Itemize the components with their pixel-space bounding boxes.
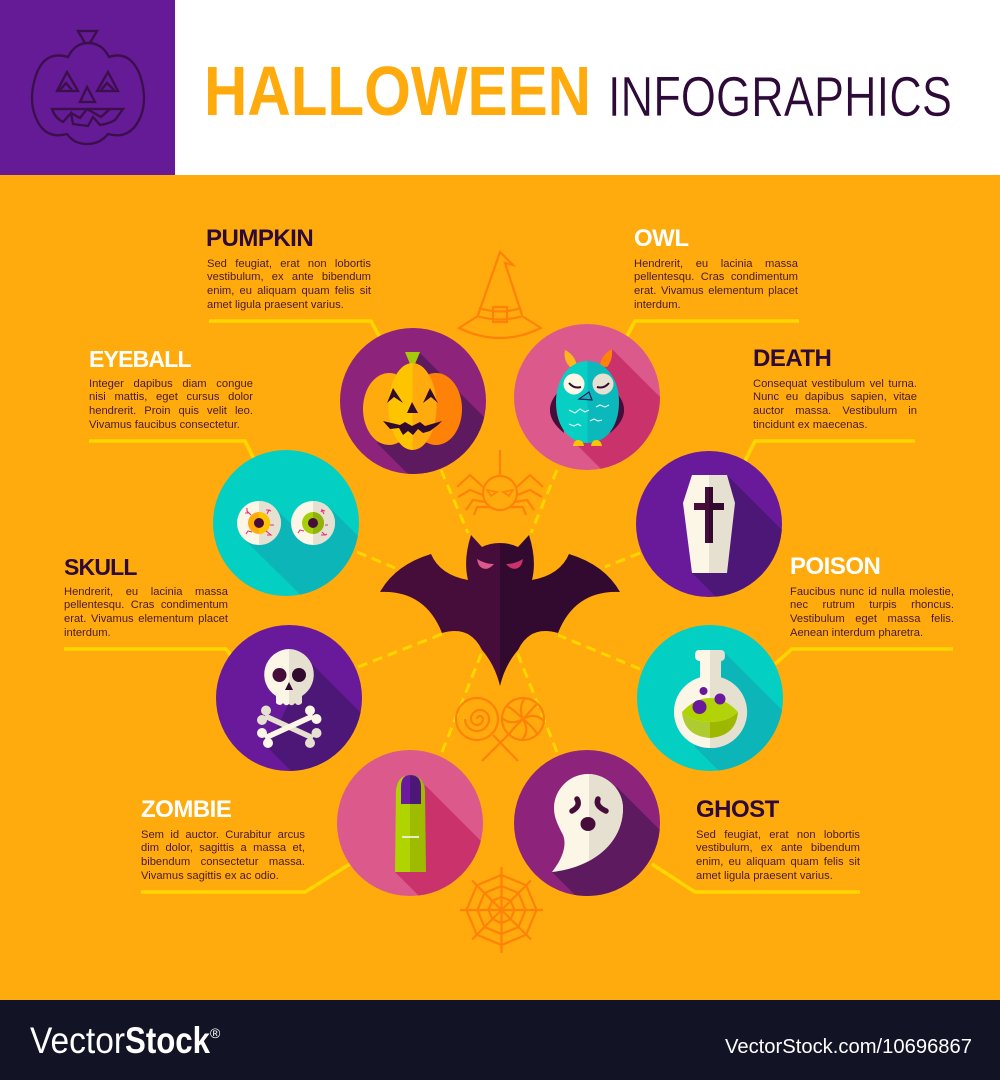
title: Halloween: HALLOWEEN [204,52,591,130]
footer bar [0,1000,1000,1080]
coffin [683,475,735,573]
text block: owl: OWL [634,225,688,252]
text block: pumpkin: Sed feugiat, erat non lobortis [207,258,371,270]
text block: zombie: Vivamus sagittis ex ac odio. [141,870,279,882]
footer url: VectorStock.com/10696867 [725,1035,972,1058]
dashed connectors [357,470,640,752]
text block: poison: POISON [790,553,880,580]
header purple panel [0,0,175,175]
text block: skull: pellentesqu. Cras condimentum [64,599,228,611]
text block: owl: pellentesqu. Cras condimentum [634,271,798,283]
text block: owl: Hendrerit, eu lacinia massa [634,258,798,270]
orange main background [0,175,1000,1000]
text block: zombie [141,796,305,882]
footer logo: VectorStock [30,1020,226,1061]
text block: eyeball: Integer dapibus diam congue [89,378,253,390]
text block: zombie: ZOMBIE [141,796,231,823]
text block: pumpkin: PUMPKIN [206,225,313,252]
icon: candy outline [456,698,544,761]
text block: eyeball: hendrerit. Proin quis velit leo. [89,405,253,417]
text block: poison: Vestibulum eget massa felis. [790,613,954,625]
text block: ghost: Sed feugiat, erat non lobortis [696,828,860,840]
panel: owl circle [514,324,660,470]
panel: zombie circle [337,750,483,896]
panel: coffin circle [636,451,782,597]
text block: ghost: vestibulum, ex ante bibendum [696,842,860,854]
icon: spider outline [457,450,543,515]
text block: death: Nunc eu dapibus sapien, vitae [753,391,917,403]
text block: skull [64,554,228,639]
eyeballs [237,501,335,545]
text block: death [753,345,917,431]
icon: witch hat outline [459,252,541,338]
icon: spiderweb outline [460,867,543,953]
text block: ghost: enim, eu aliquam quam felis sit [696,856,860,868]
ghost [552,774,623,872]
pumpkin body [363,352,462,450]
text block: death: tincidunt ex maecenas. [753,419,867,431]
yellow leader lines [64,321,953,892]
text block: owl: interdum. [634,299,681,311]
zombie finger [395,775,426,872]
footer logo: ® [210,1025,221,1041]
panel: poison circle [637,625,783,771]
text block: poison: Faucibus nunc id nulla molestie, [790,586,954,598]
header background [0,0,1000,175]
text block: ghost: amet ligula praesent varius. [696,870,833,882]
text block: death: auctor massa. Vestibulum in [753,405,917,417]
text block: zombie: Sem id auctor. Curabitur arcus [141,828,305,840]
panel: eyeball circle [213,450,359,596]
text block: zombie: bibendum consectetur massa. [141,856,305,868]
text block: poison [790,553,954,639]
text block: death: Consequat vestibulum vel turna. [753,378,917,390]
panel: skull circle [216,625,362,771]
text block: poison: nec rutrum turpis rhoncus. [790,599,954,611]
text block: eyeball: EYEBALL [89,346,191,372]
panel: pumpkin circle [340,328,486,474]
text block: pumpkin: vestibulum, ex ante bibendum [207,271,371,283]
text block: pumpkin [206,225,371,311]
icon: header pumpkin outline [32,31,144,144]
owl body [550,349,624,446]
panel: ghost circle [514,750,660,896]
text block: eyeball: Vivamus faucibus consectetur. [89,419,240,431]
text block: eyeball: nisi mattis, eget cursus dolor [89,391,253,403]
skull and crossbones [257,649,322,748]
text block: death: DEATH [753,345,831,372]
text block: skull: erat. Vivamus elementum placet [64,613,228,625]
text block: pumpkin: amet ligula praesent varius. [207,299,344,311]
text block: ghost [696,796,860,882]
text block: ghost: GHOST [696,796,779,823]
text block: pumpkin: enim, eu aliquam quam felis sit [207,285,371,297]
text block: owl [634,225,798,311]
text block: skull: interdum. [64,627,111,639]
flask [674,650,747,748]
icon: central bat [380,535,620,686]
text block: zombie: dim dolor, sagittis a massa et, [141,842,305,854]
text block: eyeball [89,346,253,431]
text block: skull: Hendrerit, eu lacinia massa [64,586,228,598]
text block: owl: erat. Vivamus elementum placet [634,285,798,297]
text block: poison: Aenean interdum pharetra. [790,627,923,639]
text block: skull: SKULL [64,554,137,580]
